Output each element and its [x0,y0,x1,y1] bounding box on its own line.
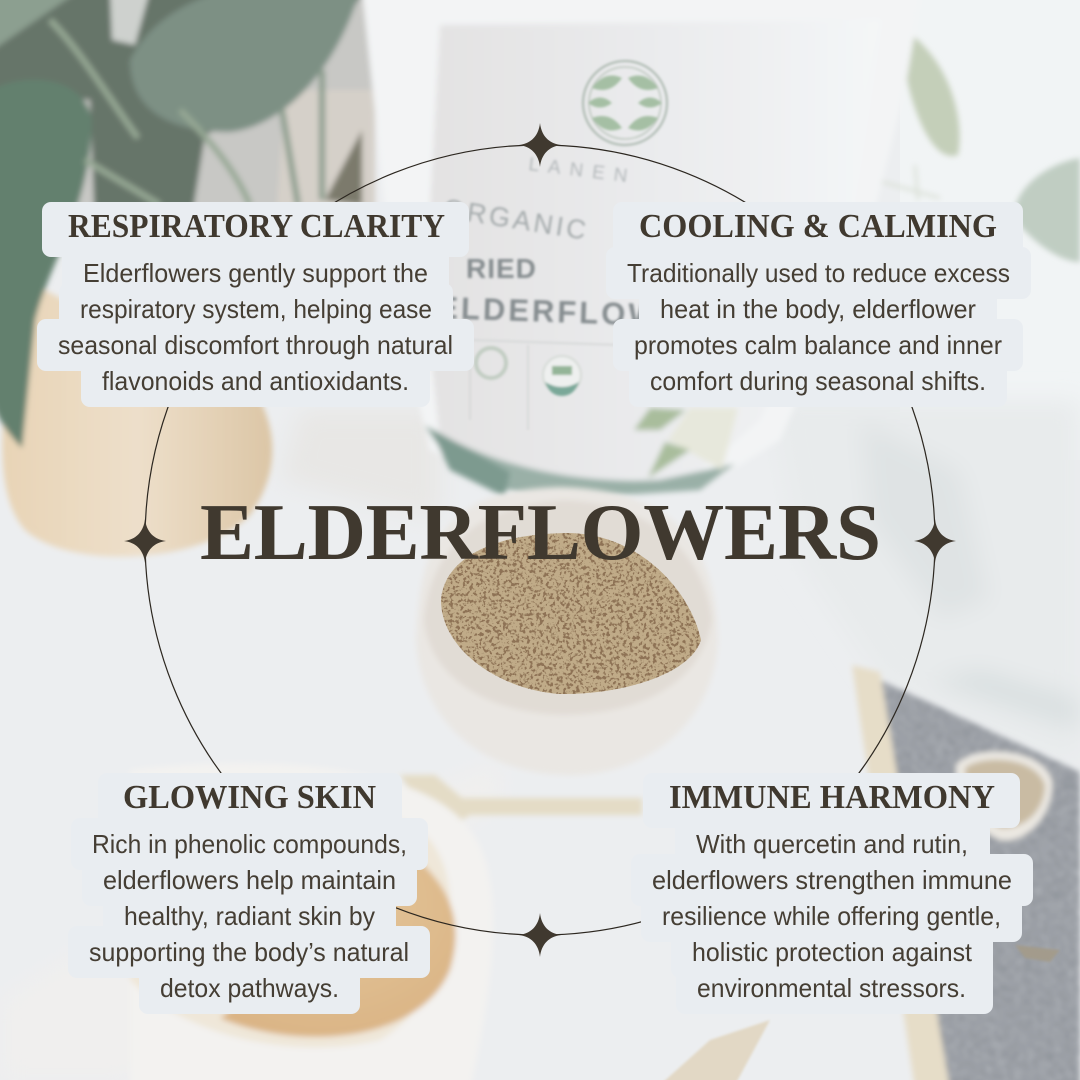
bag label details: RIED [466,253,537,284]
text block [627,258,1010,396]
bag label details: LANEN [527,154,638,188]
text block: healthy, radiant skin by [124,901,375,931]
circle ring [145,145,935,935]
text block [58,258,453,396]
star: bottom [519,913,561,957]
heading: COOLING & CALMING [639,208,997,245]
text block: heat in the body, elderflower [660,294,976,324]
text block: elderflowers help maintain [103,865,396,895]
text block: resilience while offering gentle, [662,901,1001,931]
bag label details: ELDERFLOW [437,290,661,333]
marble board [880,680,1080,1080]
text block: holistic protection against [692,937,973,967]
text block: respiratory system, helping ease [80,294,432,324]
star: left [124,519,166,563]
text block: flavonoids and antioxidants. [102,366,409,396]
text block: detox pathways. [160,973,339,1003]
bowl herbs [441,533,701,694]
bag label details: ORGANIC [441,193,591,246]
text block [652,829,1012,1003]
panel: glowing skin [68,773,430,1014]
wall behind plant [0,0,375,230]
star: right [914,519,956,563]
text block [89,829,409,1003]
panel: immune harmony [631,773,1033,1014]
text block: With quercetin and rutin, [696,829,968,859]
text block: elderflowers strengthen immune [652,865,1012,895]
text block: supporting the body’s natural [89,937,409,967]
spoon [400,775,642,826]
text block: comfort during seasonal shifts. [650,366,986,396]
text block: seasonal discomfort through natural [58,330,453,360]
leaves [0,0,365,230]
text block: promotes calm balance and inner [634,330,1002,360]
cup [130,763,493,1080]
bowl [416,487,718,775]
heading: GLOWING SKIN [123,779,376,816]
bag label details [437,61,667,430]
panel: respiratory clarity [37,202,474,407]
text block: Traditionally used to reduce excess [627,258,1010,288]
heading: IMMUNE HARMONY [669,779,995,816]
panel: cooling and calming [606,202,1031,407]
text block: environmental stressors. [697,973,966,1003]
title: ELDERFLOWERS [200,487,881,577]
pot [2,280,272,557]
star: top [519,123,561,167]
heading: RESPIRATORY CLARITY [68,208,445,245]
bag [362,0,922,492]
text block: Elderflowers gently support the [83,258,428,288]
scattered herbs [660,1020,770,1080]
text block: Rich in phenolic compounds, [92,829,407,859]
